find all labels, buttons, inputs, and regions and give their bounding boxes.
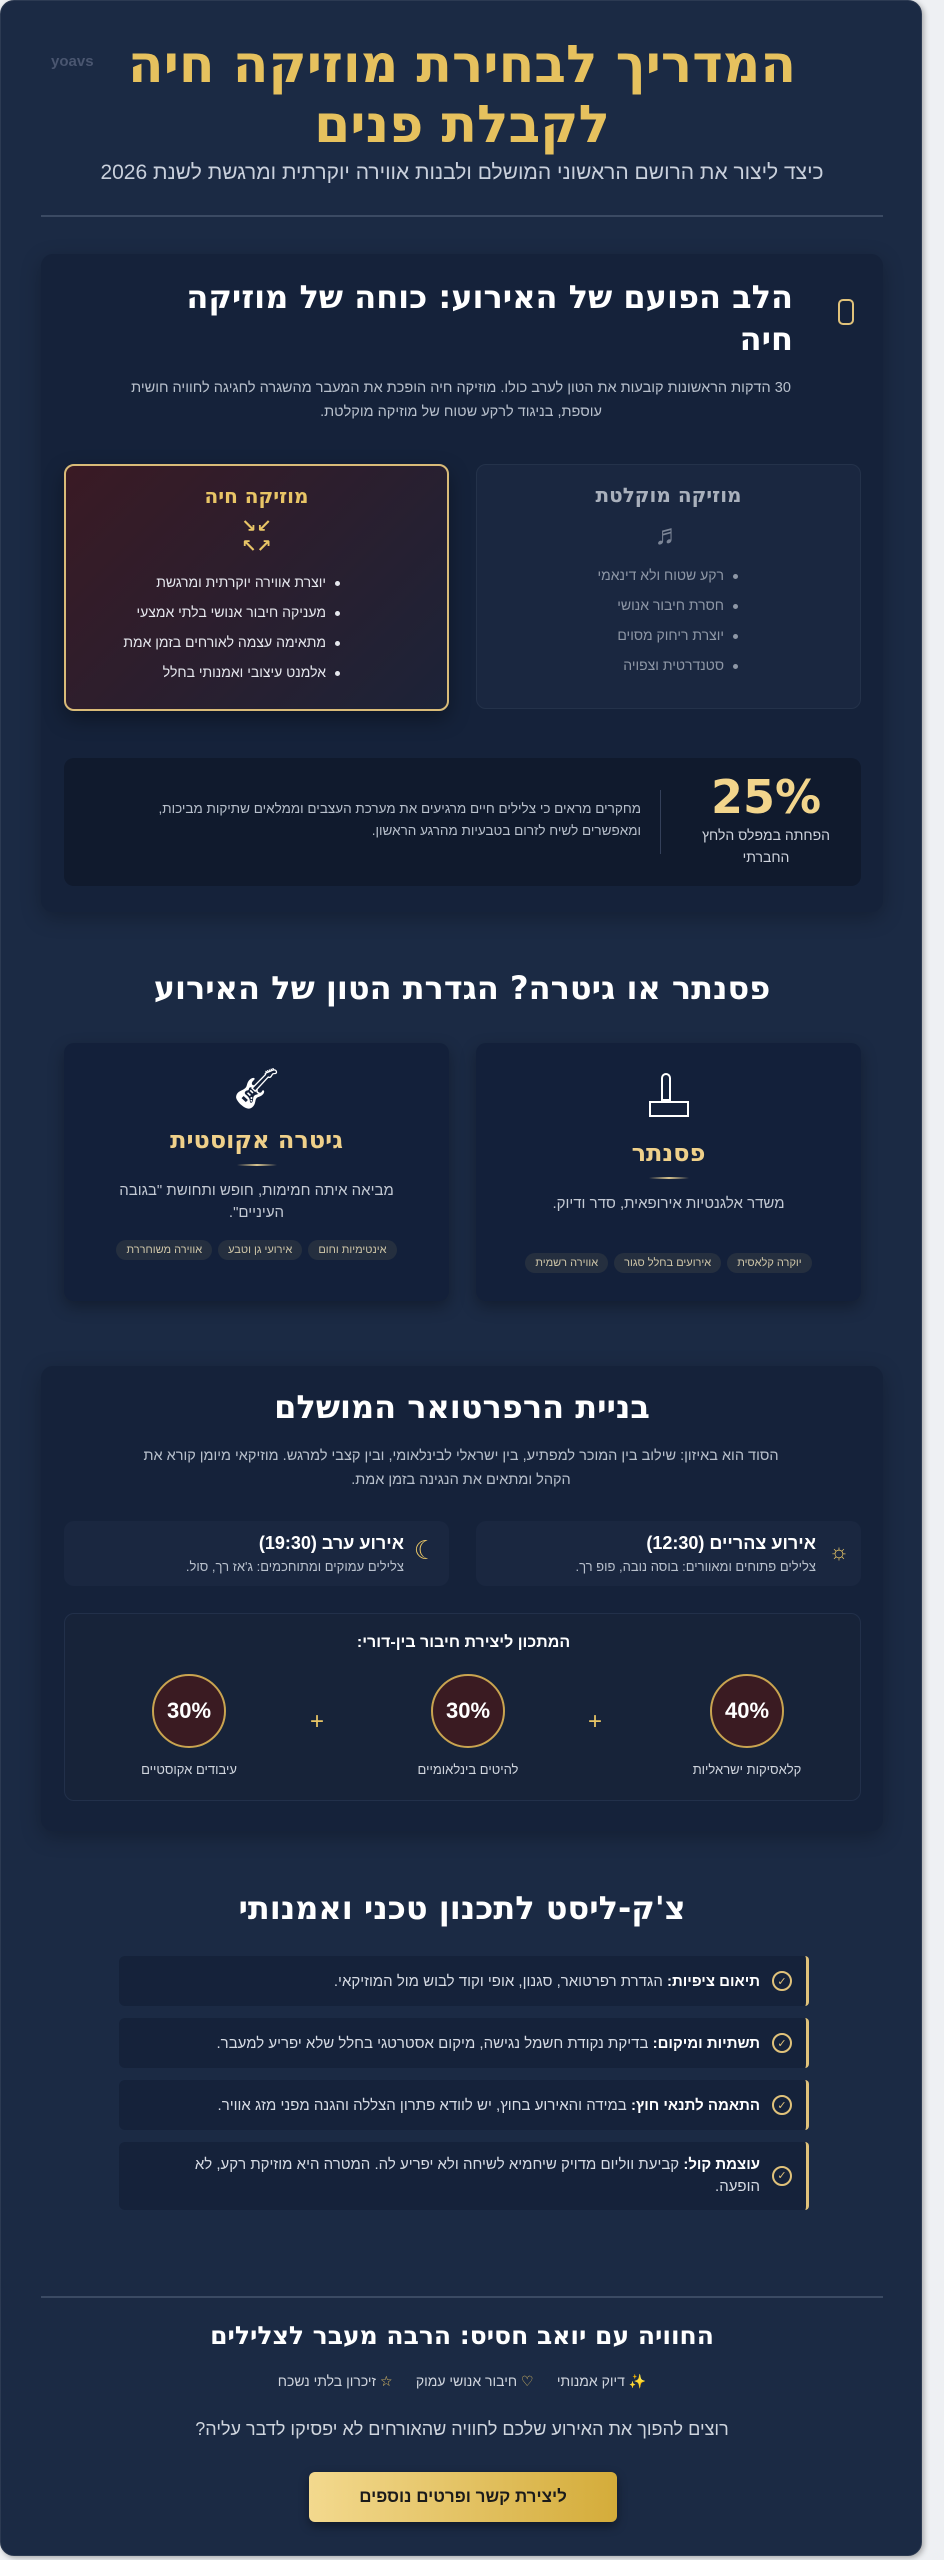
main container: ✓ (777, 2100, 787, 2112)
card: recorded music: סטנדרטית וצפויה (623, 657, 724, 673)
recipe box: המתכון ליצירת חיבור בין-דורי: (357, 1634, 570, 1651)
icon: muted note: ♬ (654, 519, 682, 550)
title: לקבלת פנים (314, 95, 610, 155)
circle 30b: 30% (167, 1698, 211, 1723)
box: noon event: צלילים פתוחים ומאוורים: בוסה נובה, פופ רך. (575, 1559, 816, 1574)
checklist items: תיאום ציפיות: הגדרת רפרטואר, סגנון, אופי וקוד לבוש מול המוזיקאי. (334, 1972, 760, 1990)
card: piano: אירועים בחלל סגור (624, 1257, 711, 1269)
card: live music: אלמנט עיצובי ואמנותי בחלל (163, 664, 326, 680)
box: noon event: אירוע צהריים (12:30) (646, 1533, 816, 1553)
card: recorded music (476, 464, 861, 709)
title: המדריך לבחירת מוזיקה חיה (128, 35, 796, 95)
card: live music (64, 464, 449, 711)
circle 30 (431, 1674, 505, 1748)
recipe box (64, 1613, 861, 1801)
recipe box: + (310, 1708, 324, 1735)
watermark: yoavs (51, 53, 94, 70)
card: live music: מעניקה חיבור אנושי בלתי אמצעי (136, 604, 326, 620)
card: piano: פסנתר (632, 1139, 705, 1167)
box: noon event: ☼ (829, 1539, 849, 1564)
checklist items: ✓ (777, 1976, 787, 1988)
stat: 25% (702, 770, 830, 865)
recipe box: להיטים בינלאומיים (418, 1762, 518, 1777)
main container: ✓ (777, 2170, 787, 2182)
box: evening event: ☾ (414, 1535, 437, 1565)
card: guitar: אווירה משוחררת (126, 1244, 202, 1256)
heading: piano or guitar: פסנתר או גיטרה? הגדרת הטון של האירוע (154, 969, 770, 1007)
final heading: החוויה עם יואב חסיס: הרבה מעבר לצלילים (210, 2321, 714, 2350)
box: evening event (64, 1521, 449, 1586)
card: guitar: אירועי גן וטבע (228, 1244, 292, 1256)
heading: הלב הפועם של האירוע: כוחה של מוזיקה חיה (186, 278, 793, 358)
box: evening event: אירוע ערב (19:30) (259, 1533, 404, 1553)
recipe box: + (588, 1708, 602, 1735)
checklist items (119, 1956, 809, 2006)
title (128, 35, 796, 155)
circle 40: 40% (725, 1698, 769, 1723)
circle 40 (710, 1674, 784, 1748)
card: recorded music: רקע שטוח ולא דינאמי (598, 567, 724, 583)
panel: power of live music (41, 254, 883, 912)
features row: ✨ דיוק אמנותי ♡ חיבור אנושי עמוק ☆ זיכרון בלתי נשכח (278, 2373, 646, 2389)
main container: ✓ (777, 2038, 787, 2050)
card: piano: משדר אלגנטיות אירופאית, סדר ודיוק. (552, 1195, 785, 1212)
circle 30: 30% (446, 1698, 490, 1723)
button: ליצירת קשר ופרטים נוספים (359, 2487, 567, 2506)
panel: repertoire (41, 1366, 883, 1831)
stat box (64, 758, 861, 886)
card: live music: יוצרת אווירה יוקרתית ומרגשת (156, 574, 326, 590)
icon: piano (649, 1073, 689, 1117)
button (309, 2472, 617, 2522)
main container: התאמה לתנאי חוץ: במידה והאירוע בחוץ, יש לוודא פתרון הצללה והגנה מפני מזג אוויר. (218, 2096, 760, 2114)
card: piano (476, 1043, 861, 1301)
box: evening event: צלילים עמוקים ומתוחכמים: ג'אז רך, סול. (186, 1559, 404, 1574)
recipe box: עיבודים אקוסטיים (141, 1762, 237, 1777)
card: guitar: אינטימיות וחום (318, 1244, 387, 1256)
heading: checklist: צ'ק-ליסט לתכנון טכני ואמנותי (238, 1889, 686, 1927)
card: live music: מוזיקה חיה (204, 484, 309, 508)
stat: 25%: 25% (711, 770, 821, 824)
card: recorded music: מוזיקה מוקלטת (595, 483, 742, 507)
stat text: מחקרים מראים כי צלילים חיים מרגיעים את מערכת העצבים וממלאים שתיקות מביכות, ומאפשרים לשיח לזרום בטבעיות מהרגע הראשון. (158, 801, 641, 838)
icon: arrows: ↗↖ (241, 536, 272, 556)
card: guitar: מביאה איתה חמימות, חופש ותחושת "בגובה העיניים". (119, 1182, 394, 1221)
main container: עוצמת קול: קביעת ווליום מדויק שיחמיא לשיחה ולא יפריע לה. המטרה היא מוזיקת רקע, לא הופעה. (195, 2156, 760, 2195)
icon: drive (838, 299, 854, 325)
text: הסוד הוא באיזון: שילוב בין המוכר למפתיע, בין ישראלי לבינלאומי, ובין קצבי למרגש. מוזיקאי מיומן קורא את הקהל ומתאים את הנגינה בזמן אמת. (143, 1448, 779, 1488)
card: piano: אווירה רשמית (535, 1257, 598, 1269)
icon: guitar: 🎸︎ (231, 1067, 282, 1111)
intro text: 30 הדקות הראשונות קובעות את הטון לערב כולו. מוזיקה חיה הופכת את המעבר מהשגרה לחגיגה לחוויה חושית עוספת, בניגוד לרקע שטוח של מוזיקה מוקלטת. (131, 380, 791, 420)
box: noon event (476, 1521, 861, 1586)
card: piano: יוקרה קלאסית (737, 1257, 802, 1269)
recipe box: קלאסיקות ישראליות (693, 1762, 801, 1777)
subtitle: כיצד ליצור את הרושם הראשוני המושלם ולבנות אווירה יוקרתית ומרגשת לשנת 2026 (100, 161, 824, 184)
heading: בניית הרפרטואר המושלם (274, 1388, 650, 1426)
card: recorded music: חסרת חיבור אנושי (617, 597, 724, 613)
stat: 25%: הפחתה במפלס הלחץ החברתי (702, 827, 830, 865)
icon: arrows: ↙↘ (241, 516, 272, 536)
main container: תשתיות ומיקום: בדיקת נקודת חשמל נגישה, מיקום אסטרטגי בחלל שלא יפריע למעבר. (217, 2034, 760, 2052)
card: recorded music: יוצרת ריחוק מסוים (617, 627, 724, 643)
question: רוצים להפוך את האירוע שלכם לחוויה שהאורחים לא יפסיקו לדבר עליה? (195, 2419, 729, 2439)
circle 30b (152, 1674, 226, 1748)
card: guitar: גיטרה אקוסטית (170, 1126, 343, 1154)
icon: arrows (241, 516, 272, 556)
card: guitar (64, 1043, 449, 1301)
card: live music: מתאימה עצמה לאורחים בזמן אמת (123, 634, 326, 650)
